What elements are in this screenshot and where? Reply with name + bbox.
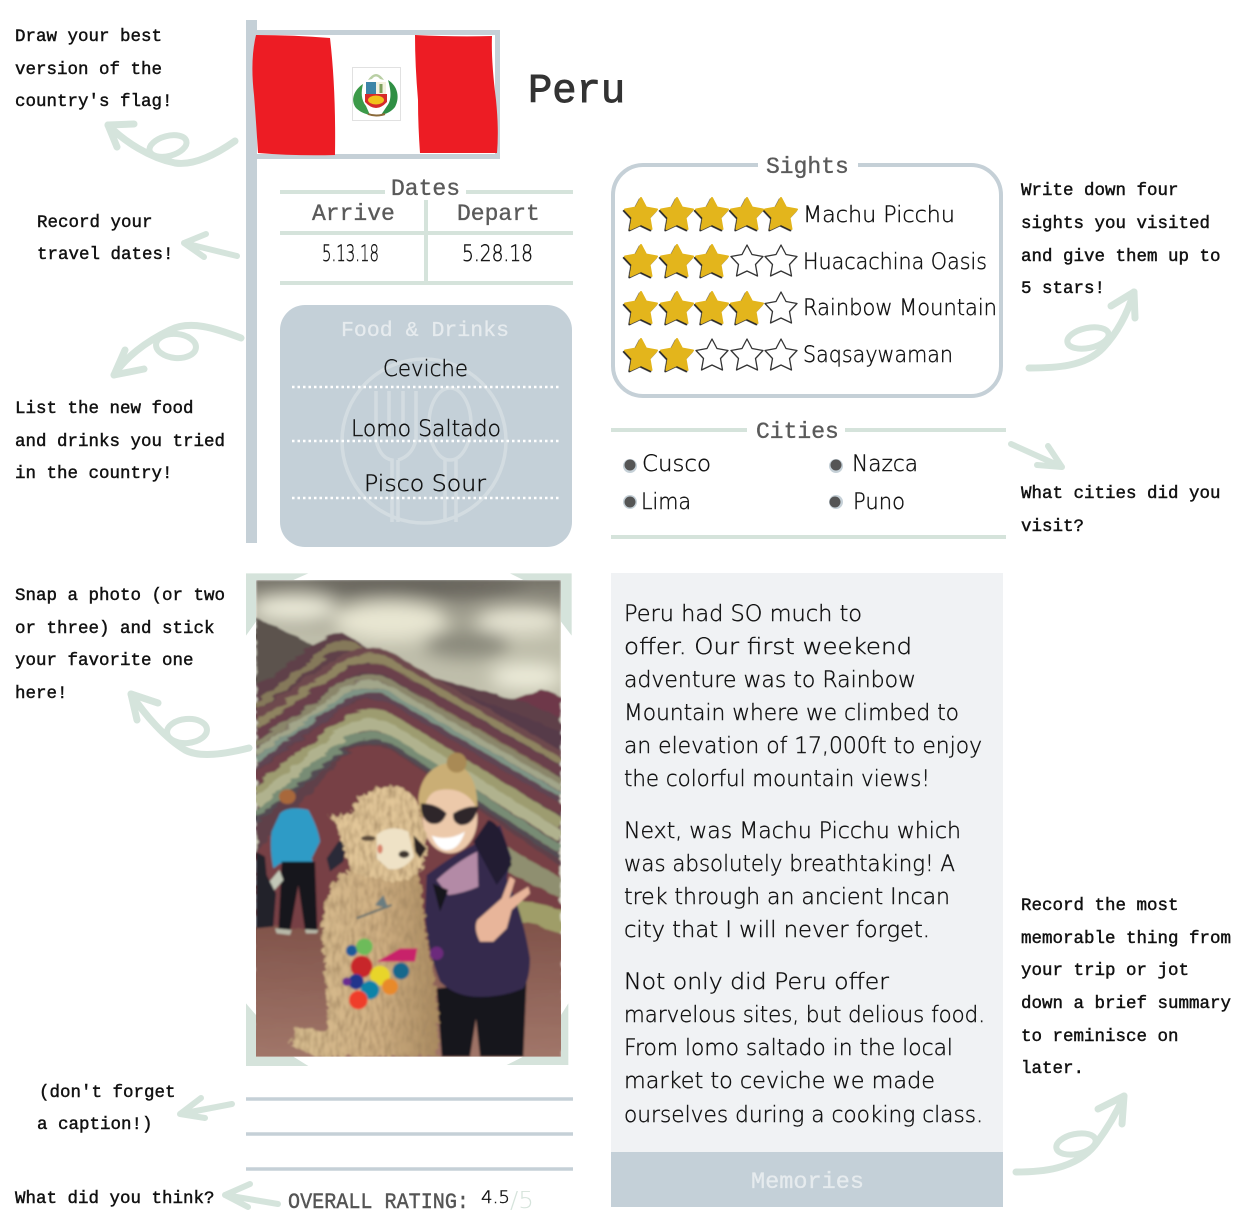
flag pole and frame [246, 20, 500, 543]
note: photo: your favorite one [15, 651, 194, 671]
arrow: dates note [184, 234, 237, 257]
star rating: Rainbow Mountain 4 stars [625, 292, 797, 323]
journal text: an elevation of 17,000ft to enjoy [624, 734, 982, 759]
note: sights: 5 stars! [1021, 279, 1105, 299]
note: food [15, 399, 225, 484]
note: flag: Draw your best [15, 27, 162, 47]
panel: cities [611, 419, 1006, 537]
note: cities: What cities did you [1021, 484, 1221, 504]
pompom decoration [342, 938, 443, 1009]
icon: plate with fork and spoon [342, 359, 506, 523]
note: flag: country's flag! [15, 92, 173, 112]
back ridge [253, 618, 563, 1062]
food item: Pisco Sour [364, 472, 487, 497]
arrow: flag note [108, 124, 235, 163]
note: memories [1021, 896, 1231, 1079]
food item: Lomo Saltado [351, 417, 501, 442]
alpaca [290, 786, 438, 1057]
arrive date: 5.13.18 [322, 242, 379, 267]
sight name: Saqsaywaman [803, 343, 953, 368]
star rating: Huacachina Oasis 3 stars [625, 245, 797, 276]
memories banner [611, 1152, 1003, 1207]
heading: sights: Sights [766, 154, 849, 180]
photo: woman with alpaca at Rainbow Mountain [250, 579, 563, 1062]
city: Puno [853, 490, 905, 515]
hand-drawn Peru flag [252, 35, 498, 155]
note: sights: Write down four [1021, 181, 1179, 201]
note: dates: Record your [37, 213, 153, 233]
note: photo [15, 586, 225, 704]
woman [418, 753, 530, 1057]
journal text: trek through an ancient Incan [624, 885, 950, 910]
arrow: cities note [1011, 444, 1062, 467]
heading: cities: Cities [756, 419, 839, 445]
note: memories: later. [1021, 1059, 1084, 1079]
label: arrive: Arrive [312, 201, 395, 227]
note: cities: visit? [1021, 517, 1084, 537]
note: flag [15, 27, 173, 112]
journal text: adventure was to Rainbow [624, 668, 916, 693]
journal text: Next, was Machu Picchu which [624, 819, 961, 844]
note: caption: (don't forget [39, 1083, 176, 1103]
note: cities [1021, 484, 1221, 537]
note: photo: Snap a photo (or two [15, 586, 225, 606]
journal text: From lomo saltado in the local [624, 1036, 953, 1061]
icon: Peruvian coat of arms [352, 68, 400, 120]
city: Lima [641, 490, 691, 515]
city: Cusco [642, 452, 711, 477]
rating scale: /5 [510, 1188, 534, 1214]
arrow: rating note [225, 1184, 278, 1207]
note: food: in the country! [15, 464, 173, 484]
city: Nazca [852, 452, 918, 477]
note: dates: travel dates! [37, 245, 174, 265]
note: sights [1021, 181, 1221, 299]
note: photo: or three) and stick [15, 619, 215, 639]
journal text [624, 602, 985, 1128]
note: memories: to reminisce on [1021, 1027, 1179, 1047]
journal text: ourselves during a cooking class. [624, 1103, 983, 1128]
star rating: Machu Picchu 5 stars [625, 198, 797, 229]
journal text: Mountain where we climbed to [624, 701, 959, 726]
arrow: food note [114, 325, 241, 375]
panel: sights [613, 154, 1001, 396]
overall rating [288, 1188, 534, 1215]
star rating: Saqsaywaman 2 stars [625, 339, 797, 370]
heading: food and drinks: Food & Drinks [341, 319, 509, 343]
sight name: Machu Picchu [803, 203, 955, 228]
dates table [280, 176, 573, 283]
journal text: offer. Our first weekend [624, 635, 912, 660]
label: depart: Depart [457, 201, 540, 227]
note: memories: Record the most [1021, 896, 1179, 916]
note: memories: memorable thing from [1021, 929, 1231, 949]
rating label: OVERALL RATING: [288, 1190, 469, 1215]
note: food: List the new food [15, 399, 194, 419]
food item: Ceviche [383, 357, 468, 382]
arrow: memories note [1016, 1096, 1124, 1172]
bullet markers [623, 459, 843, 509]
ground [253, 922, 563, 1062]
journal text: marvelous sites, but delious food. [624, 1003, 985, 1028]
arrow: caption note [180, 1098, 232, 1118]
sight name: Rainbow Mountain [803, 296, 997, 321]
note: caption: a caption!) [37, 1115, 153, 1135]
note: photo: here! [15, 684, 68, 704]
panel: memories journal [611, 573, 1003, 1207]
photo with corner mounts [246, 573, 572, 1066]
rainbow bands [256, 645, 561, 858]
journal text: Not only did Peru offer [624, 970, 890, 995]
journal text: was absolutely breathtaking! A [624, 852, 955, 877]
journal text: market to ceviche we made [624, 1069, 935, 1094]
title: Peru: Peru [528, 69, 625, 115]
note: sights: sights you visited [1021, 214, 1210, 234]
journal text: the colorful mountain views! [624, 767, 930, 792]
journal text: city that I will never forget. [624, 918, 930, 943]
caption lines [246, 1099, 573, 1169]
note: rating: What did you think? [15, 1189, 215, 1209]
hiker in blue jacket [256, 789, 347, 935]
note: dates [37, 213, 174, 265]
arrow: photo note [131, 694, 249, 754]
note: flag: version of the [15, 60, 162, 80]
sight name: Huacachina Oasis [803, 250, 987, 275]
panel: food and drinks [280, 305, 572, 547]
heading: dates: Dates [391, 176, 460, 202]
journal text: Peru had SO much to [624, 602, 862, 627]
depart date: 5.28.18 [462, 242, 533, 267]
photo corner mounts [246, 573, 572, 1066]
note: caption [37, 1083, 176, 1135]
alpaca face and halter [357, 828, 427, 918]
note: memories: your trip or jot [1021, 961, 1189, 981]
note: memories: down a brief summary [1021, 994, 1231, 1014]
arrow: sights note [1029, 292, 1135, 368]
heading: memories: Memories [751, 1169, 864, 1196]
note: food: and drinks you tried [15, 432, 225, 452]
rating value: 4.5 [481, 1188, 510, 1208]
note: sights: and give them up to [1021, 247, 1221, 267]
